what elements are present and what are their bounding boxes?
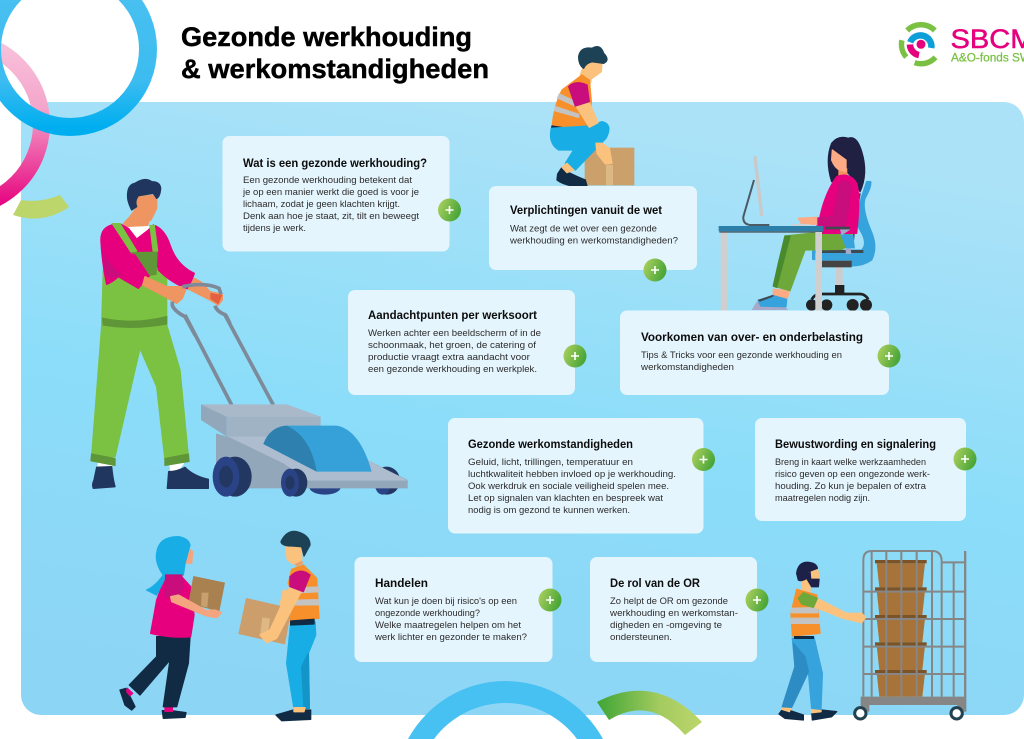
monitor: [743, 156, 769, 225]
heading: Gezonde werkomstandigheden: [468, 438, 633, 451]
text block: [374, 596, 527, 643]
text block: Welke maatregelen helpen om het: [375, 620, 521, 631]
icon: plus button: [564, 344, 586, 368]
panel: Handelen: [354, 557, 562, 662]
heading: Wat is een gezonde werkhouding?: [243, 157, 427, 170]
decorative pink ring: [0, 40, 42, 208]
text block: nodig is om gezond te kunnen werken.: [468, 505, 630, 516]
text block: Wat kun je doen bij risico's op een: [375, 596, 517, 607]
worker pushing: [779, 562, 866, 720]
plant pots: [875, 560, 927, 697]
heading: De rol van de OR: [610, 577, 701, 590]
mower handle: [185, 315, 273, 405]
text block: Zo helpt de OR om gezonde: [610, 596, 728, 607]
mower front wheels: [213, 457, 307, 497]
office chair: [806, 182, 875, 311]
logo SBCM: [901, 24, 1024, 64]
panel: Gezonde werkomstandigheden: [448, 418, 715, 534]
text block: productie vraagt extra aandacht voor: [368, 352, 531, 363]
cart frame: [855, 551, 966, 719]
decorative blue ring: [0, 0, 148, 127]
squatting worker: [551, 47, 612, 186]
text block: risico geven op een ongezonde werk-: [775, 469, 930, 480]
text block: [468, 457, 676, 516]
mower rear wheels: [309, 467, 400, 495]
cardboard box: [585, 148, 634, 185]
icon: plus button: [954, 448, 976, 470]
panel: De rol van de OR: [590, 557, 768, 662]
decorative green arc left: [13, 195, 69, 219]
text block: lichaam, zodat je geen klachten krijgt.: [243, 199, 400, 210]
text block: luchtkwaliteit hebben invloed op je werkhouding.: [468, 469, 676, 480]
text block: Denk aan hoe je staat, zit, tilt en beweegt: [243, 211, 419, 222]
panel: Wat is een gezonde werkhouding: [222, 136, 461, 252]
panel: Voorkomen van over- en onderbelasting: [620, 310, 900, 395]
woman with hijab: [120, 537, 225, 718]
title: Gezonde werkhouding: [181, 22, 472, 52]
text block: werkhouding en werkomstandigheden?: [509, 236, 678, 246]
illustration: worker lifting box: [551, 47, 634, 186]
icon: plus button: [746, 588, 768, 612]
heading: Verplichtingen vanuit de wet: [510, 204, 662, 217]
title: [181, 22, 489, 84]
gardener upper body: [101, 180, 230, 335]
text block: Wat zegt de wet over een gezonde: [510, 224, 657, 234]
text block: Tips & Tricks voor een gezonde werkhouding en: [641, 350, 842, 361]
text block: een gezonde werkhouding en werkplek.: [368, 364, 537, 375]
icon: plus button: [538, 588, 562, 612]
text block: tijdens je werk.: [243, 223, 306, 234]
desk: [719, 224, 823, 312]
icon: plus button: [438, 198, 461, 222]
decorative blue ring bottom: [408, 681, 603, 739]
panel: Verplichtingen vanuit de wet: [489, 186, 697, 282]
text block: Een gezonde werkhouding betekent dat: [243, 175, 412, 186]
text block: werkhouding en werkomstan-: [609, 608, 738, 619]
text block: [242, 175, 419, 234]
panel: Aandachtpunten per werksoort: [348, 290, 586, 395]
text block: Werken achter een beeldscherm of in de: [368, 328, 541, 339]
text block: [609, 596, 738, 643]
text block: werkomstandigheden: [640, 362, 734, 373]
illustration: gardener with lawn mower: [91, 180, 408, 497]
text block: schoonmaak, het groen, de catering of: [368, 340, 536, 351]
mower hood: [263, 426, 372, 472]
text block: digheden en -omgeving te: [610, 620, 722, 631]
text block: Ook werkdruk en sociale veiligheid spelen mee.: [468, 481, 669, 492]
icon: plus button: [878, 344, 900, 368]
text block: houding. Zo kun je bepalen of extra: [775, 481, 927, 492]
text block: [640, 350, 842, 373]
text block: [368, 328, 541, 375]
text block: ongezonde werkhouding?: [375, 608, 480, 619]
text block: Let op signalen van klachten en bespreek wat: [468, 493, 663, 504]
decorative green arc bottom: [597, 691, 702, 735]
text block: je op een manier werkt die goed is voor je: [242, 187, 419, 198]
illustration: woman at desk: [719, 137, 875, 312]
title: & werkomstandigheden: [181, 54, 489, 84]
icon: plus button: [644, 258, 666, 282]
desk rear leg: [721, 232, 727, 310]
text block: Breng in kaart welke werkzaamheden: [775, 457, 926, 468]
mower body: [201, 404, 408, 488]
panel: Bewustwording en signalering: [755, 418, 976, 521]
heading: Bewustwording en signalering: [775, 438, 936, 451]
heading: Handelen: [375, 577, 428, 590]
icon: plus button: [692, 448, 715, 471]
text block: Geluid, licht, trillingen, temperatuur en: [468, 457, 633, 468]
seated woman: [752, 137, 865, 310]
icon: logo rings: [901, 25, 936, 64]
illustration: two people passing boxes: [120, 531, 319, 721]
text block: [775, 457, 930, 504]
man with orange vest: [238, 531, 319, 721]
text block: ondersteunen.: [610, 632, 672, 643]
text block: maatregelen nodig zijn.: [775, 493, 870, 504]
illustration: worker pushing plant cart: [779, 551, 966, 720]
heading: Aandachtpunten per werksoort: [368, 309, 537, 322]
text block: werk lichter en gezonder te maken?: [374, 632, 527, 643]
heading: Voorkomen van over- en onderbelasting: [641, 331, 863, 344]
gardener legs: [91, 270, 208, 488]
text block: [509, 224, 678, 246]
